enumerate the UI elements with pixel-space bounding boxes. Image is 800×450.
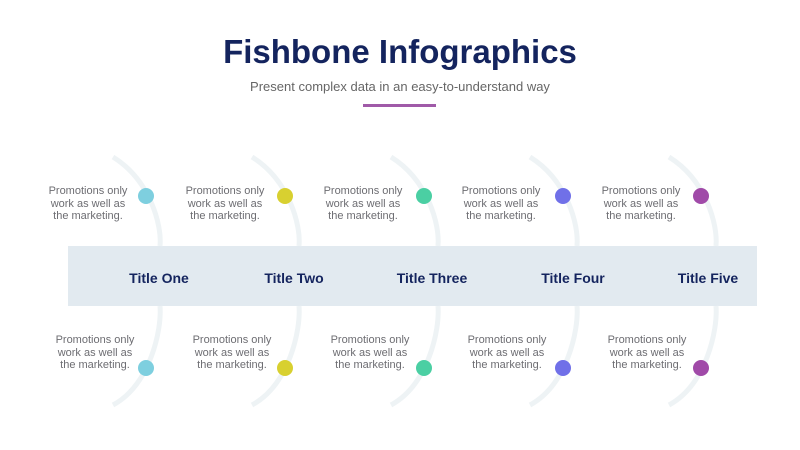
- titles: Title Four: [541, 270, 605, 286]
- top texts: work as well as: [51, 198, 125, 210]
- spine band: [68, 246, 757, 306]
- bottom texts: work as well as: [58, 346, 132, 358]
- bottom texts: Promotions only: [468, 334, 546, 346]
- top texts: Promotions only: [602, 185, 680, 197]
- titles: Title Three: [397, 270, 467, 286]
- bottom texts: Promotions only: [608, 334, 686, 346]
- top texts: work as well as: [604, 198, 678, 210]
- title: Fishbone Infographics: [223, 33, 577, 70]
- bottom texts: [56, 334, 686, 371]
- top texts: work as well as: [464, 198, 538, 210]
- top texts: the marketing.: [466, 210, 536, 222]
- top texts: Promotions only: [462, 185, 540, 197]
- top texts: the marketing.: [328, 210, 398, 222]
- titles: Title One: [129, 270, 189, 286]
- bottom texts: Promotions only: [193, 334, 271, 346]
- titles: Title Five: [678, 270, 738, 286]
- top texts: Promotions only: [324, 185, 402, 197]
- top texts: Promotions only: [186, 185, 264, 197]
- top texts: work as well as: [326, 198, 400, 210]
- top texts: the marketing.: [53, 210, 123, 222]
- accent line: [363, 104, 436, 107]
- bottom texts: work as well as: [610, 346, 684, 358]
- bottom texts: work as well as: [195, 346, 269, 358]
- bottom texts: the marketing.: [60, 359, 130, 371]
- bottom texts: work as well as: [470, 346, 544, 358]
- titles: Title Two: [264, 270, 324, 286]
- bottom texts: the marketing.: [335, 359, 405, 371]
- top texts: the marketing.: [190, 210, 260, 222]
- bottom texts: work as well as: [333, 346, 407, 358]
- top texts: work as well as: [188, 198, 262, 210]
- top texts: [49, 185, 680, 222]
- bottom texts: the marketing.: [472, 359, 542, 371]
- top texts: Promotions only: [49, 185, 127, 197]
- bottom texts: the marketing.: [612, 359, 682, 371]
- top texts: the marketing.: [606, 210, 676, 222]
- bottom texts: Promotions only: [331, 334, 409, 346]
- bottom texts: the marketing.: [197, 359, 267, 371]
- bottom texts: Promotions only: [56, 334, 134, 346]
- subtitle: Present complex data in an easy-to-understand way: [250, 79, 550, 94]
